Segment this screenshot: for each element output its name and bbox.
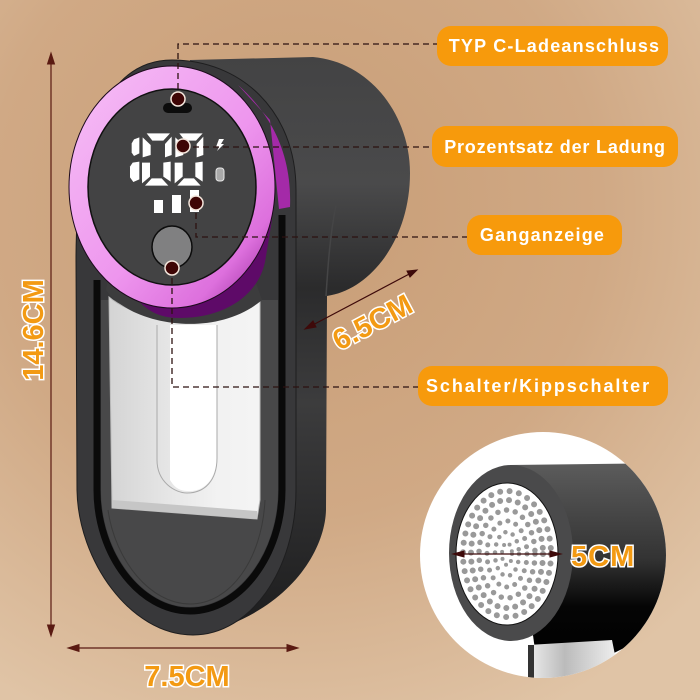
rear body <box>190 57 410 634</box>
power button <box>152 226 192 268</box>
depth label: 6.5CM <box>328 289 418 357</box>
front body inner rim <box>97 215 282 611</box>
product: lint shaver <box>69 57 410 635</box>
neck crease <box>326 205 336 296</box>
height dimension arrow <box>48 53 54 636</box>
label: USB-C port: TYP C-Ladeanschluss <box>449 36 660 56</box>
width dimension arrow <box>68 644 298 652</box>
inset label: 5CM <box>571 541 635 573</box>
label: charge percentage <box>432 126 678 167</box>
callout dots <box>165 92 203 275</box>
depth dimension arrow <box>305 270 417 329</box>
bolt icon <box>216 139 224 151</box>
inset dimension arrow <box>453 551 561 557</box>
window bottom ledge <box>112 500 257 519</box>
panel outline <box>108 500 265 604</box>
window tube outline <box>157 325 217 493</box>
USB-C port <box>163 103 192 113</box>
inset mesh holes <box>463 491 551 617</box>
label: switch: Schalter/Kippschalter <box>426 376 651 396</box>
window tube <box>170 325 217 491</box>
callout lines <box>172 44 467 387</box>
inset mesh <box>456 483 558 625</box>
battery icon <box>216 168 224 181</box>
window shade under ring <box>106 270 262 324</box>
width label: 7.5CM <box>144 661 230 693</box>
label: switch <box>418 366 668 406</box>
front body <box>76 60 296 635</box>
display face <box>88 89 256 285</box>
front body lower panel <box>101 300 278 607</box>
height label: 14.6CM <box>18 279 50 381</box>
percentage digits <box>130 133 203 186</box>
inset body <box>510 463 680 655</box>
inset: cutter head <box>420 432 680 680</box>
side ring accent <box>238 85 290 209</box>
label: charge percentage: Prozentsatz der Ladung <box>444 137 666 157</box>
label: gear indicator <box>467 215 622 255</box>
ring shadow <box>130 200 272 318</box>
gear bars <box>154 190 199 213</box>
metallic purple ring <box>69 66 275 308</box>
inset white circle <box>420 432 666 678</box>
waste window <box>109 297 260 519</box>
label: USB-C port <box>437 26 668 66</box>
inset handle window <box>529 640 615 678</box>
label: gear indicator: Ganganzeige <box>480 225 605 245</box>
inset head rim <box>449 465 573 641</box>
